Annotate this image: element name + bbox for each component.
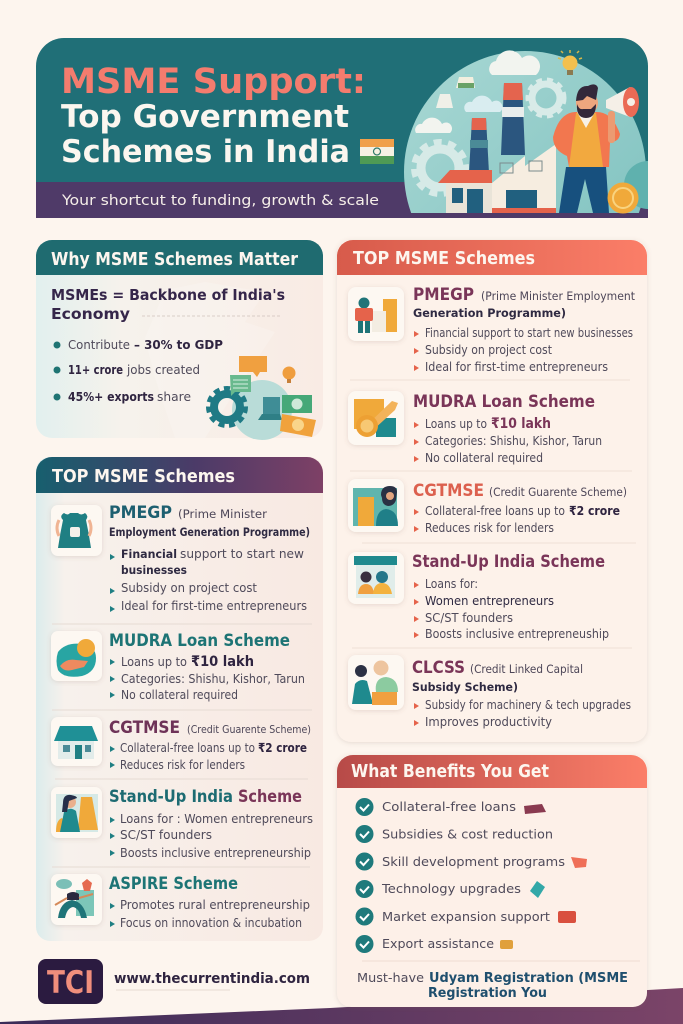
scheme heading: (Credit Linked Capital xyxy=(470,662,583,676)
scheme bullets: Categories: Shishu, Kishor, Tarun xyxy=(121,672,305,686)
chimneys xyxy=(501,83,525,155)
scheme bullets: Boosts inclusive entrepreneuship xyxy=(425,627,609,641)
scheme: PMEGP xyxy=(348,285,635,374)
scheme heading: PMEGP xyxy=(413,285,474,305)
stat: jobs xyxy=(54,362,200,377)
scheme heading: Generation Programme) xyxy=(413,306,566,320)
stat: jobs: 11+ crore xyxy=(68,362,123,377)
scheme: CLCSS xyxy=(348,655,631,729)
icon: businessman with coins xyxy=(348,479,404,532)
bottom ribbon xyxy=(0,988,683,1024)
clouds xyxy=(489,50,540,75)
subheading: Economy xyxy=(51,305,130,323)
stat: exports: 45%+ exports xyxy=(68,389,154,404)
icon: woman entrepreneur xyxy=(51,787,102,838)
scheme heading: (Credit Guarente Scheme) xyxy=(187,724,311,736)
panel: why MSME schemes matter xyxy=(36,240,323,440)
scheme bullets xyxy=(110,547,307,613)
megaphone xyxy=(606,87,630,117)
factory xyxy=(492,144,556,212)
scheme heading: (Credit Guarente Scheme) xyxy=(489,485,627,499)
scheme heading: CGTMSE xyxy=(413,481,484,501)
scheme: ASPIRE xyxy=(51,874,310,930)
scheme bullets: SC/ST founders xyxy=(425,611,513,625)
scheme heading: CLCSS xyxy=(412,658,465,678)
scheme bullets: Reduces risk for lenders xyxy=(425,521,554,535)
panel heading xyxy=(36,457,323,493)
scheme bullets: No collateral required xyxy=(121,688,238,702)
scheme bullets: Focus on innovation & incubation xyxy=(120,916,302,930)
scheme bullets: Collateral-free loans up to xyxy=(120,741,255,755)
icon: farmer with coins xyxy=(348,287,404,341)
subheading: MSMEs = Backbone of India's xyxy=(51,286,285,304)
subheading xyxy=(51,286,285,323)
scheme bullets: Loans for : Women entrepreneurs xyxy=(120,812,313,826)
benefit: collateral-free loans: Collateral-free loans xyxy=(382,800,516,814)
scheme: Stand-Up India xyxy=(348,552,609,641)
scheme heading: CGTMSE xyxy=(109,718,180,738)
icon: rural growth xyxy=(51,874,102,925)
benefit: export assistance: Export assistance xyxy=(382,937,494,951)
panel: top MSME schemes left xyxy=(36,457,323,941)
scheme heading: PMEGP xyxy=(109,503,172,523)
scheme bullets: ₹2 crore xyxy=(569,503,620,518)
scheme bullets: Financial xyxy=(121,547,177,561)
scheme bullets xyxy=(110,740,307,772)
icon: advisor with client xyxy=(348,655,404,710)
logo: TCI xyxy=(38,959,103,1004)
scheme heading: Employment Generation Programme) xyxy=(109,525,310,539)
benefit: skill development: Skill development programs xyxy=(382,855,565,869)
scheme heading: Scheme xyxy=(238,787,302,807)
scheme bullets: ₹10 lakh xyxy=(191,654,254,670)
scheme bullets xyxy=(414,326,633,374)
title xyxy=(61,62,366,170)
scheme heading xyxy=(413,285,635,320)
scheme: CGTMSE xyxy=(51,717,311,772)
panel heading: TOP MSME Schemes xyxy=(52,467,235,487)
icon: coin and documents xyxy=(348,391,404,445)
scheme bullets: businesses xyxy=(121,563,187,577)
scheme bullets: ₹10 lakh xyxy=(491,416,551,432)
scheme bullets: Reduces risk for lenders xyxy=(120,758,245,772)
scheme bullets: Categories: Shishu, Kishor, Tarun xyxy=(425,434,602,448)
scheme: MUDRA xyxy=(348,391,602,465)
scheme heading: MUDRA Loan Scheme xyxy=(109,631,290,651)
panel heading xyxy=(337,755,647,788)
scheme heading xyxy=(109,503,310,539)
scheme bullets xyxy=(110,654,305,702)
panel: what benefits you get xyxy=(337,755,647,1007)
title: Schemes in India xyxy=(61,134,350,170)
scheme heading: Subsidy Scheme) xyxy=(412,680,518,694)
illustration: business icons xyxy=(208,356,316,440)
scheme bullets: Ideal for first-time entrepreneurs xyxy=(425,360,608,374)
panel heading xyxy=(36,240,323,275)
scheme bullets: Women entrepreneurs xyxy=(425,594,554,608)
panel: top MSME schemes right xyxy=(337,240,647,742)
title: Top Government xyxy=(61,99,349,135)
scheme heading: Stand-Up India Scheme xyxy=(412,552,605,572)
benefit: market expansion: Market expansion support xyxy=(382,910,550,924)
coin xyxy=(608,182,638,214)
scheme bullets: Promotes rural entrepreneurship xyxy=(120,898,310,912)
scheme bullets xyxy=(110,898,310,930)
panel heading: What Benefits You Get xyxy=(351,762,549,782)
scheme bullets xyxy=(110,812,313,860)
benefit: subsidies xyxy=(356,825,553,843)
panel heading xyxy=(337,240,647,275)
stat: exports: share xyxy=(157,390,191,404)
icon: shop xyxy=(51,717,102,766)
panel heading: Why MSME Schemes Matter xyxy=(51,250,298,270)
scheme heading xyxy=(109,718,311,738)
scheme bullets xyxy=(414,577,609,641)
scheme bullets: SC/ST founders xyxy=(120,828,212,842)
scheme bullets: Ideal for first-time entrepreneurs xyxy=(121,599,307,613)
header banner xyxy=(36,38,648,218)
scheme bullets: Loans up to xyxy=(425,417,487,431)
icon: light bulb xyxy=(558,50,582,75)
benefit: collateral-free loans xyxy=(356,798,546,816)
benefit: export assistance xyxy=(356,935,513,953)
benefit: market expansion xyxy=(356,908,576,926)
title: MSME Support: xyxy=(61,62,366,102)
icon: Indian flag xyxy=(360,139,394,164)
benefit: technology upgrades xyxy=(356,880,545,898)
subtitle band xyxy=(36,182,648,218)
scheme bullets: Financial support to start new businesses xyxy=(425,326,633,340)
scheme bullets xyxy=(414,503,620,535)
scheme bullets: ₹2 crore xyxy=(258,740,307,755)
scheme bullets: Loans for: xyxy=(425,577,478,591)
stat: GDP xyxy=(54,337,223,352)
callout: Udyam registration: Must-have xyxy=(357,971,424,985)
scheme heading: MUDRA Loan Scheme xyxy=(413,392,595,412)
scheme heading: (Prime Minister Employment xyxy=(481,289,635,303)
callout: Udyam registration: Registration You xyxy=(428,986,547,1001)
scheme heading: ASPIRE Scheme xyxy=(109,874,238,894)
stat: GDP: – 30% to GDP xyxy=(134,337,223,352)
scheme bullets: Loans up to xyxy=(121,655,187,669)
scheme heading xyxy=(412,658,583,694)
stat: GDP: Contribute xyxy=(68,338,130,352)
scheme bullets: Improves productivity xyxy=(425,715,552,729)
subtitle: Your shortcut to funding, growth & scale xyxy=(61,193,379,209)
website address: www.thecurrentindia.com xyxy=(114,971,310,987)
scheme bullets: No collateral required xyxy=(425,451,543,465)
scheme bullets: Subsidy on project cost xyxy=(121,581,257,595)
scheme heading: Stand-Up India xyxy=(109,787,233,807)
man xyxy=(559,167,609,213)
logo: TCI: TCI xyxy=(47,965,94,1001)
benefit: subsidies: Subsidies & cost reduction xyxy=(382,828,553,842)
scheme bullets: Subsidy on project cost xyxy=(425,343,552,357)
benefit: skill development xyxy=(356,852,587,870)
scheme bullets: Subsidy for machinery & tech upgrades xyxy=(425,698,631,712)
scheme bullets xyxy=(414,698,631,729)
gears xyxy=(532,84,560,112)
scheme: MUDRA xyxy=(51,631,305,702)
scheme bullets: support to start new xyxy=(180,547,304,561)
scheme bullets: Boosts inclusive entrepreneurship xyxy=(120,846,311,860)
scheme: CGTMSE xyxy=(348,479,627,535)
panel heading: TOP MSME Schemes xyxy=(353,249,535,269)
scheme heading xyxy=(413,481,627,501)
icon: women founders xyxy=(348,552,404,604)
scheme: Stand-Up India xyxy=(51,787,313,860)
icon: hand with coin xyxy=(51,631,102,681)
scheme heading: (Prime Minister xyxy=(178,507,267,521)
scheme bullets: Collateral-free loans up to xyxy=(425,504,565,518)
stat: jobs: jobs created xyxy=(126,363,200,377)
benefit: technology upgrades: Technology upgrades xyxy=(381,882,521,896)
scheme bullets xyxy=(414,416,602,465)
scheme: PMEGP xyxy=(51,503,310,613)
icon: money bag xyxy=(51,505,102,556)
callout: Udyam registration: Udyam Registration (MSME xyxy=(429,971,628,986)
illustration: factory and entrepreneur xyxy=(404,50,648,214)
faint map backdrop xyxy=(145,282,275,438)
callout: Udyam registration xyxy=(357,971,628,1001)
